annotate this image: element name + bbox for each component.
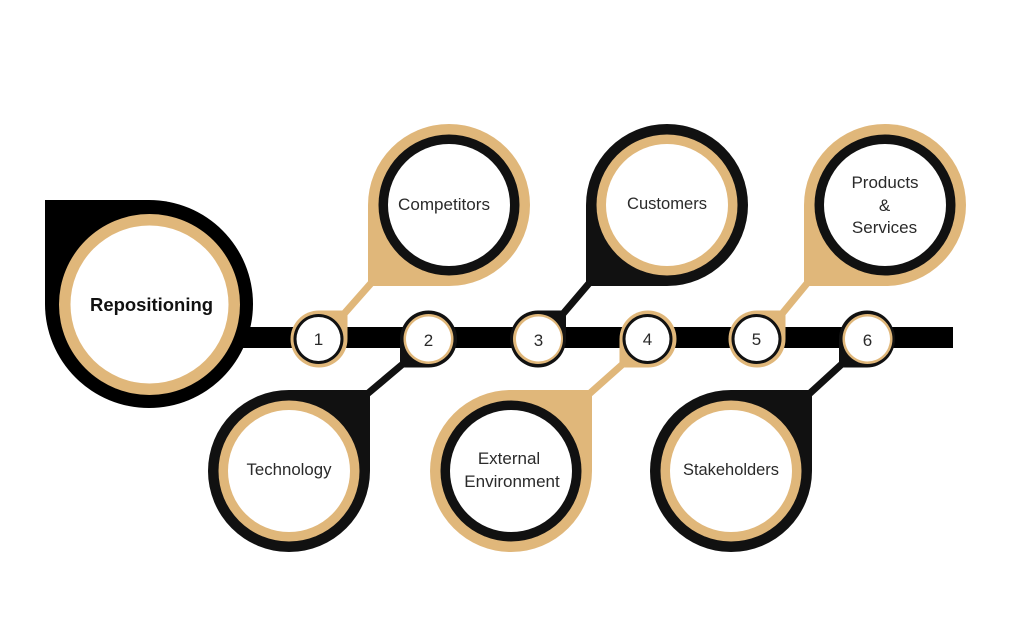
callout: Products & Services	[781, 124, 966, 315]
white disc	[450, 410, 572, 532]
dark ring	[440, 400, 582, 542]
number: 2	[424, 331, 433, 350]
white disc	[606, 144, 728, 266]
node ring	[732, 314, 782, 364]
label: Technology	[246, 460, 332, 479]
node disc	[406, 316, 451, 362]
callout: External Environment	[430, 363, 624, 552]
teardrop backing	[430, 390, 592, 552]
tan ring	[660, 400, 802, 542]
node ring	[404, 314, 454, 364]
node disc	[516, 316, 561, 362]
connector	[808, 363, 843, 395]
label: Competitors	[398, 195, 490, 214]
node 6	[839, 310, 895, 368]
timeline bar	[235, 327, 953, 348]
label: &	[879, 196, 891, 215]
label: Products	[851, 173, 919, 192]
white disc	[824, 144, 946, 266]
white disc	[388, 144, 510, 266]
node backing	[400, 310, 457, 368]
node ring	[622, 314, 672, 364]
node disc	[845, 316, 890, 362]
callout: Customers	[562, 124, 748, 315]
teardrop backing	[804, 124, 966, 286]
teardrop backing	[208, 390, 370, 552]
node backing	[510, 310, 566, 368]
node disc	[734, 317, 778, 361]
node backing	[620, 310, 676, 368]
tan ring	[59, 214, 240, 395]
label: Customers	[627, 194, 707, 213]
dark ring	[814, 134, 956, 276]
white disc	[228, 410, 350, 532]
node backing	[728, 310, 786, 368]
teardrop backing	[45, 200, 253, 408]
main teardrop: Repositioning	[45, 200, 253, 408]
connector	[366, 363, 404, 395]
callout: Competitors	[343, 124, 530, 315]
node 3	[510, 310, 566, 368]
number: 6	[863, 331, 872, 350]
node 2	[400, 310, 457, 368]
teardrop backing	[368, 124, 530, 286]
node ring	[842, 314, 892, 364]
number: 4	[643, 330, 652, 349]
teardrop backing	[586, 124, 748, 286]
connector	[781, 281, 809, 315]
dark ring	[378, 134, 520, 276]
node backing	[290, 310, 348, 368]
label: External	[478, 449, 540, 468]
callout: Technology	[208, 363, 404, 552]
node disc	[626, 317, 670, 361]
number: 5	[752, 330, 761, 349]
callout: Stakeholders	[650, 363, 843, 552]
white disc	[70, 226, 228, 384]
teardrop backing	[650, 390, 812, 552]
tan ring	[596, 134, 738, 276]
connector	[588, 363, 624, 395]
number: 1	[314, 330, 323, 349]
label: Services	[852, 218, 917, 237]
node backing	[839, 310, 895, 368]
white disc	[670, 410, 792, 532]
connector	[562, 281, 591, 315]
heading: Repositioning	[90, 295, 213, 315]
node 1	[290, 310, 348, 368]
number: 3	[534, 331, 543, 350]
label: Stakeholders	[683, 460, 779, 479]
node 4	[620, 310, 676, 368]
node 5	[728, 310, 786, 368]
node ring	[513, 314, 563, 364]
label: Environment	[464, 472, 560, 491]
node ring	[294, 314, 344, 364]
tan ring	[218, 400, 360, 542]
node disc	[296, 317, 340, 361]
connector	[343, 281, 373, 315]
